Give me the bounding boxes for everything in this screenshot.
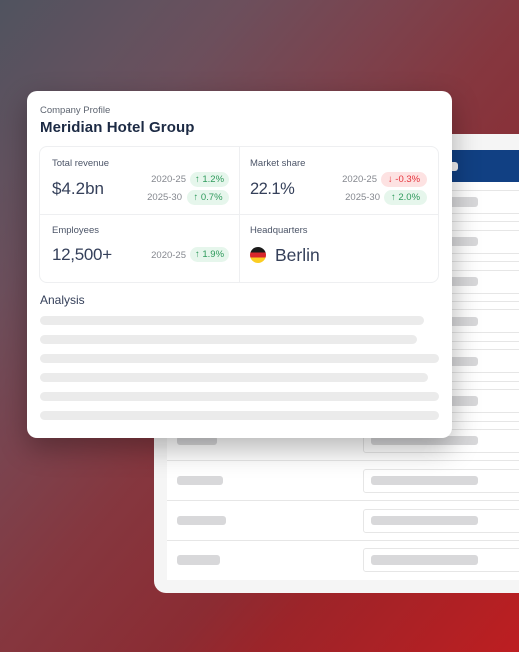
table rows: inputs and placeholders [177,190,519,572]
metric: market share: 2020-25 [342,174,377,185]
icon: german flag [250,247,266,263]
metric: total revenue: ↑ 0.7% [193,192,223,203]
metric: market share: ↓ -0.3% [388,174,420,185]
metric: total revenue: $4.2bn [52,179,104,198]
metric: total revenue: 2025-30 [147,192,182,203]
metric: total revenue: 2020-25 [151,174,186,185]
metric: headquarters [250,225,320,265]
panel: company profile card [27,91,452,438]
metric: total revenue: ↑ 1.2% [195,174,224,185]
eyebrow: company profile: Company Profile [40,105,110,116]
title: Meridian Hotel Group [40,119,195,136]
metric: market share: ↑ 2.0% [391,192,420,203]
panel: background table [154,134,519,593]
metric: employees: ↑ 1.9% [195,249,224,260]
table header label placeholder [440,162,458,171]
metric: total revenue: Total revenue [52,158,109,169]
metric: headquarters: Headquarters [250,225,308,236]
metric: total revenue [52,158,229,205]
metric: headquarters: Berlin [275,245,320,265]
table body [167,182,519,580]
panel: metrics grid [39,146,439,283]
metric: employees: 12,500+ [52,245,112,264]
metric: market share [250,158,427,205]
heading: analysis: Analysis [40,293,85,307]
metric: employees [52,225,229,264]
metric: market share: 2025-30 [345,192,380,203]
metric: employees: 2020-25 [151,250,186,261]
table header bar [167,150,519,182]
analysis text placeholders [40,316,439,420]
metric: market share: 22.1% [250,180,294,198]
metric: employees: Employees [52,225,99,236]
metric: market share: Market share [250,158,305,169]
